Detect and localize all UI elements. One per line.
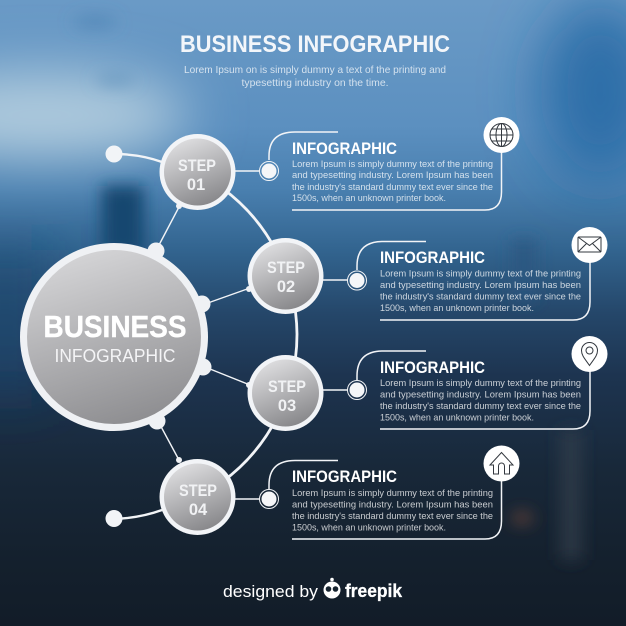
step 01: 01 — [187, 176, 205, 194]
icon: map pin — [572, 336, 608, 372]
panel: info 03 — [323, 336, 608, 429]
subtitle — [184, 64, 446, 89]
step 04: 04 — [189, 501, 208, 519]
panel: info 01: Lorem Ipsum is simply dummy text of the printing — [292, 158, 493, 169]
step 02: STEP — [267, 259, 305, 277]
panel: info 01: 1500s, when an unknown printer book. — [292, 192, 446, 203]
panel: info 02: INFOGRAPHIC — [380, 248, 485, 267]
panel: info 01: INFOGRAPHIC — [292, 139, 397, 158]
footer: designed by freepik — [223, 578, 403, 601]
panel: info 03: and typesetting industry. Lorem Ipsum has been — [380, 388, 581, 400]
panel: info 02: Lorem Ipsum is simply dummy text of the printing — [380, 268, 581, 278]
panel: info 03: the industry's standard dummy text ever since the — [380, 400, 581, 411]
panel: info 01 — [235, 117, 520, 210]
step 03: STEP — [268, 378, 306, 396]
panel: info 02: and typesetting industry. Lorem Ipsum has been — [380, 279, 581, 290]
panel: info 02: the industry's standard dummy text ever since the — [380, 290, 581, 302]
panel: info 03: 1500s, when an unknown printer book. — [380, 412, 534, 422]
subtitle: typesetting industry on the time. — [242, 77, 388, 89]
step 01 — [160, 134, 236, 210]
panel: info 04 — [235, 446, 520, 539]
step 02 — [246, 238, 324, 314]
panel: info 02: 1500s, when an unknown printer book. — [380, 302, 534, 313]
panel: info 03: Lorem Ipsum is simply dummy text of the printing — [380, 377, 581, 388]
panel: info 01: and typesetting industry. Lorem Ipsum has been — [292, 169, 493, 180]
footer: designed by freepik: designed by — [223, 582, 319, 601]
footer: designed by freepik: freepik — [345, 581, 403, 601]
step 01: STEP — [178, 157, 216, 175]
icon: globe — [484, 117, 520, 153]
panel: info 03: INFOGRAPHIC — [380, 358, 485, 377]
panel: info 04: Lorem Ipsum is simply dummy text of the printing — [292, 487, 493, 498]
title: BUSINESS INFOGRAPHIC — [180, 31, 450, 58]
central label — [44, 309, 186, 366]
panel: info 04: INFOGRAPHIC — [292, 467, 397, 486]
step 04 — [160, 457, 236, 535]
icon: freepik mascot — [324, 578, 340, 598]
panel: info 04: 1500s, when an unknown printer book. — [292, 522, 446, 532]
panel: info 04: the industry's standard dummy text ever since the — [292, 510, 493, 521]
icon: house — [484, 446, 520, 482]
icon: envelope — [572, 227, 608, 263]
step 02: 02 — [277, 278, 295, 296]
step 03: 03 — [278, 397, 296, 415]
panel: info 01: the industry's standard dummy text ever since the — [292, 181, 493, 192]
step 03 — [246, 355, 324, 431]
end dots — [106, 146, 122, 527]
panel: info 04: and typesetting industry. Lorem Ipsum has been — [292, 498, 493, 510]
central label: BUSINESS — [44, 309, 186, 344]
central label: INFOGRAPHIC — [54, 346, 176, 366]
step 04: STEP — [179, 482, 217, 500]
network connectors — [114, 154, 297, 519]
subtitle: Lorem Ipsum on is simply dummy a text of the printing and — [184, 64, 446, 76]
central circle — [20, 242, 212, 431]
panel: info 02 — [323, 227, 608, 320]
